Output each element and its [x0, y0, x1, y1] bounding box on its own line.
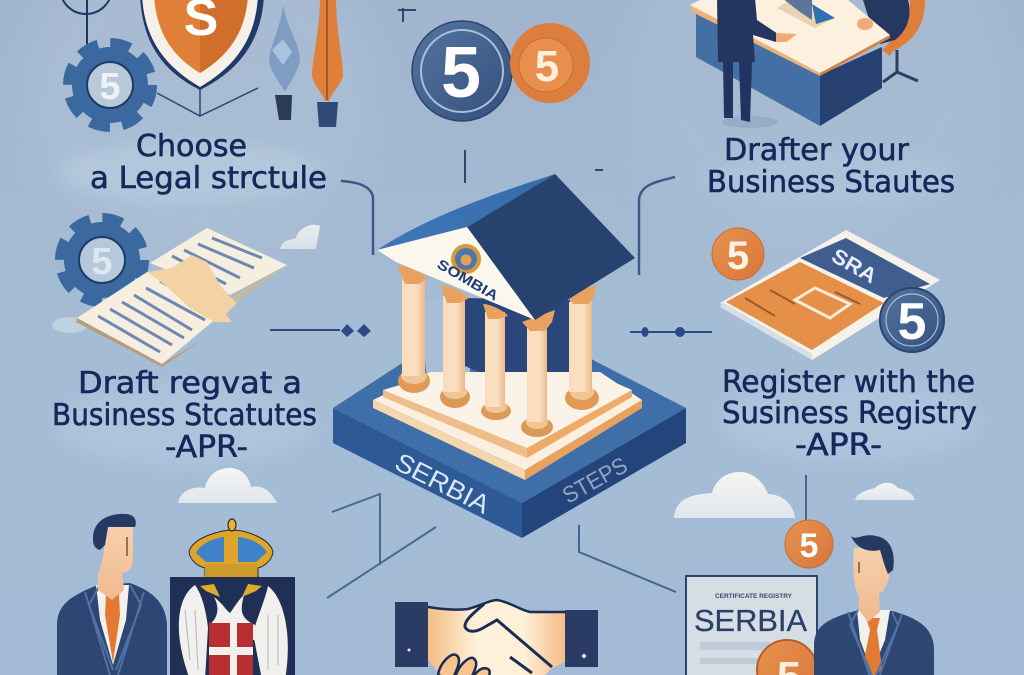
background sky gap above platform	[420, 300, 470, 395]
platform	[333, 300, 686, 538]
figure: businessman left	[57, 514, 167, 675]
heading: choose a legal structure	[90, 129, 327, 196]
icon: navy coin 5: 5	[898, 293, 926, 351]
wing feathers	[185, 610, 278, 670]
pediment label: SOMBIA	[434, 256, 501, 304]
heading: register with the business registry APR: Susiness Registry	[722, 396, 977, 431]
icon: orange coin 5	[510, 23, 590, 103]
icon: lower orange coin 5	[757, 640, 817, 675]
panel: choose a legal structure	[60, 0, 343, 196]
icon: cloud lower left	[178, 468, 277, 503]
icon: handshake	[395, 600, 598, 675]
connector: lower right	[579, 475, 806, 592]
roof	[377, 174, 635, 320]
columns	[398, 266, 599, 437]
panel: draft business statutes document	[52, 219, 320, 465]
emblem	[451, 244, 481, 274]
eagle wings	[179, 585, 288, 675]
connector lines under the shield	[157, 88, 258, 116]
heading: register with the business registry APR: -APR-	[795, 428, 882, 463]
panel: founder with Serbian coat of arms	[57, 514, 295, 675]
heading: draft your business statutes: Business Stautes	[707, 165, 955, 200]
heading: draft your business statutes: Drafter your	[724, 133, 910, 168]
heading: register with the business registry APR	[722, 365, 977, 463]
connector: left node line	[270, 324, 371, 337]
heading: draft a business statutes APR	[52, 366, 317, 465]
icon: gear with number 5	[69, 44, 151, 126]
document: Serbia certificate: CERTIFICATE REGISTRY	[715, 594, 792, 600]
icon: large cloud lower right	[674, 472, 795, 518]
illustration: registry booklet	[720, 230, 940, 360]
document: Serbia certificate: SERBIA	[694, 603, 807, 638]
connector: top left to temple	[341, 181, 373, 255]
icon: gear with number 5	[61, 219, 143, 301]
figure: businessman right	[814, 535, 934, 675]
icon: small orange coin 5: 5	[800, 527, 818, 565]
icon: small orange coin 5	[785, 520, 833, 568]
eagle heads	[200, 584, 262, 597]
heading: choose a legal structure: a Legal strctule	[90, 161, 327, 196]
illustration: desk with two people	[690, 0, 925, 128]
icon: orange coin 5	[712, 228, 764, 280]
heading: register with the business registry APR: Register with the	[722, 365, 975, 400]
icon: gear with number 5: 5	[99, 66, 121, 108]
platform label: Serbia: SERBIA	[390, 447, 495, 520]
icon: small cloud lower right	[855, 483, 915, 500]
panel: draft your business statutes	[690, 0, 955, 200]
icon: orange leaf plant	[312, 0, 343, 127]
document: Serbia certificate	[686, 576, 817, 675]
heading: draft your business statutes	[707, 133, 955, 200]
icon: orange shield with letter S	[140, 0, 264, 90]
temple back wall	[465, 298, 570, 395]
heading: draft a business statutes APR: Draft regvat a	[78, 366, 302, 401]
steps	[373, 372, 642, 480]
icon: crosshair target	[60, 0, 112, 48]
icon: navy coin 5	[880, 288, 944, 352]
illustration: central temple on platform	[333, 174, 686, 538]
icon: blue leaf plant	[269, 5, 300, 120]
platform label: Steps: STEPS	[558, 452, 632, 508]
panel: register with the business registry	[712, 228, 977, 463]
icon: Serbian coat of arms flag	[170, 577, 295, 675]
icon: navy coin 5: 5	[441, 33, 481, 113]
illustration: registry booklet: SRA	[828, 244, 881, 288]
shield crest	[209, 623, 253, 675]
connector: top right to temple	[639, 177, 675, 275]
illustration: open document with seal	[52, 228, 287, 367]
icon: navy coin 5	[412, 21, 512, 121]
heading: draft a business statutes APR: -APR-	[165, 430, 248, 465]
icon: gold crown	[189, 519, 273, 577]
connector: right node line	[630, 327, 712, 337]
icon: small cloud left	[280, 225, 320, 249]
icon: orange coin 5: 5	[727, 234, 749, 278]
decorative tick marks	[398, 8, 603, 183]
panel: number coins at top centre	[412, 21, 590, 121]
heading: choose a legal structure: Choose	[136, 129, 247, 164]
panel: Serbia certificate and businessman	[686, 520, 934, 675]
connector: lower left	[327, 493, 436, 598]
icon: orange coin 5: 5	[535, 42, 559, 91]
heading: draft a business statutes APR: Business Stcatutes	[52, 398, 317, 433]
icon: gear with number 5: 5	[91, 241, 113, 283]
